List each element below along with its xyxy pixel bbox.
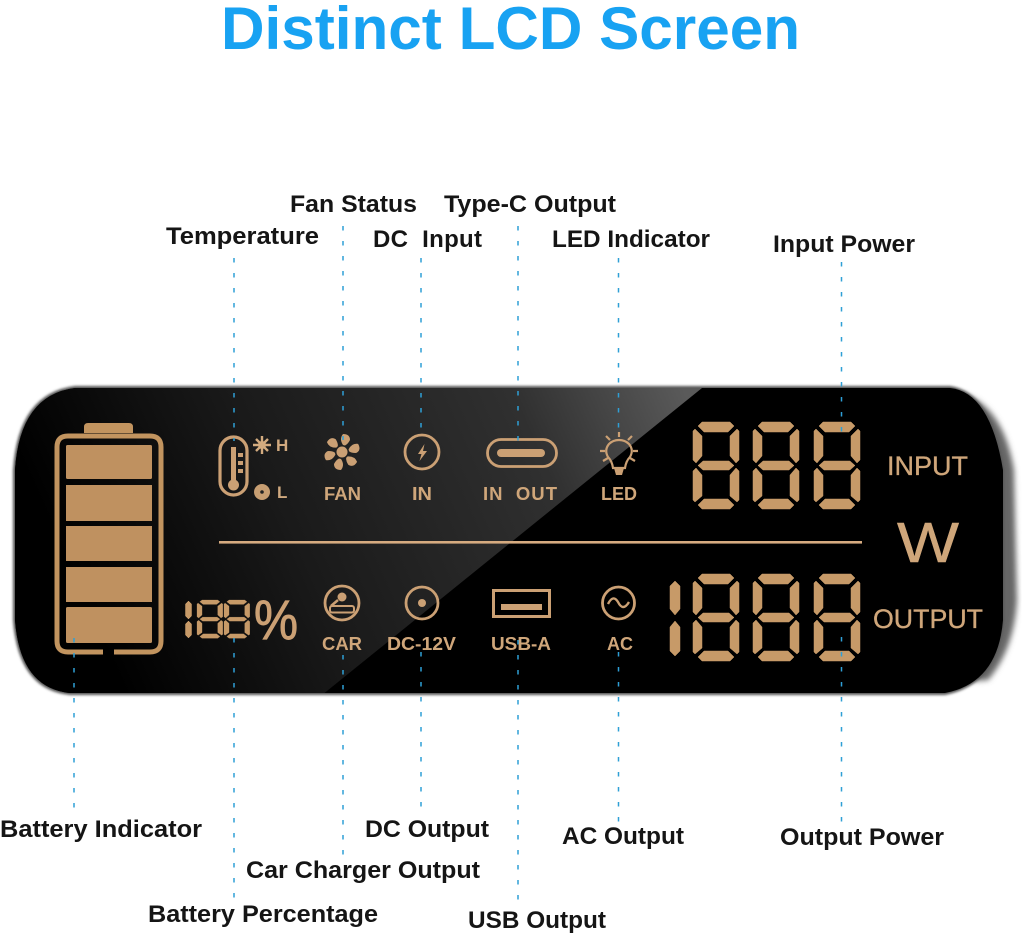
- icon: battery: [57, 423, 161, 652]
- callout: LED indicator leader line: [618, 258, 620, 436]
- label: Input Power: Input Power: [773, 231, 915, 258]
- label: LED: LED: [601, 483, 637, 504]
- icon: USB-C port: [488, 440, 556, 466]
- callout: DC input leader line: [420, 258, 422, 438]
- icon: USB-A port: [494, 590, 550, 616]
- label: IN: IN: [412, 483, 432, 504]
- callout: Type-C output leader line: [517, 226, 519, 442]
- label: DC-12V: DC-12V: [387, 633, 457, 654]
- icon: thermometer with high and low markers: H: [276, 436, 288, 455]
- callout: AC output leader line: [618, 652, 620, 822]
- callout: output power leader line: [840, 637, 842, 822]
- icon: thermometer with high and low markers: [220, 436, 288, 502]
- label: FAN: FAN: [324, 483, 361, 504]
- callout: battery indicator leader line: [73, 638, 75, 812]
- label: Type-C Output: Type-C Output: [444, 191, 616, 218]
- callout: fan status leader line: [342, 226, 344, 440]
- icon: AC sine wave: [602, 587, 634, 619]
- label: Battery Indicator: Battery Indicator: [0, 816, 202, 843]
- label: DC Input: DC Input: [373, 226, 482, 253]
- label: CAR: CAR: [322, 633, 362, 654]
- label: USB-A: USB-A: [491, 633, 551, 654]
- callout: DC output leader line: [420, 652, 422, 815]
- input power digits: [693, 422, 860, 509]
- glass reflection: [15, 388, 702, 695]
- callout: battery percentage leader line: [233, 638, 235, 900]
- callout: input power leader line: [840, 262, 842, 441]
- label: OUTPUT: OUTPUT: [873, 604, 983, 634]
- label: DC Output: DC Output: [365, 816, 489, 843]
- label: W unit: W: [897, 511, 959, 575]
- label: INPUT: INPUT: [887, 451, 968, 481]
- label: Temperature: Temperature: [166, 223, 319, 250]
- label: AC: AC: [607, 633, 633, 654]
- icon: LED bulb: [600, 432, 638, 475]
- callout: USB output leader line: [517, 640, 519, 905]
- icon: thermometer with high and low markers: L: [277, 483, 287, 502]
- label: AC Output: AC Output: [562, 823, 684, 850]
- label: USB Output: USB Output: [468, 907, 606, 934]
- battery percentage readout: %: [254, 588, 298, 651]
- label: Fan Status: Fan Status: [290, 191, 417, 218]
- label: Car Charger Output: Car Charger Output: [246, 857, 480, 884]
- panel: LCD screen: [13, 386, 1017, 695]
- icon: DC input: [405, 435, 439, 469]
- callout: temperature leader line: [233, 258, 235, 441]
- label: IN OUT: IN OUT: [483, 483, 558, 504]
- icon: DC output: [406, 587, 438, 619]
- battery percentage readout: [186, 588, 298, 651]
- divider line: [219, 541, 862, 544]
- icon: fan: [322, 434, 362, 470]
- output power digits: [670, 574, 860, 661]
- label: LED Indicator: LED Indicator: [552, 226, 710, 253]
- icon: car charger: [325, 586, 359, 620]
- label: Battery Percentage: Battery Percentage: [148, 901, 378, 928]
- label: Output Power: Output Power: [780, 824, 944, 851]
- callout: car charger output leader line: [342, 655, 344, 855]
